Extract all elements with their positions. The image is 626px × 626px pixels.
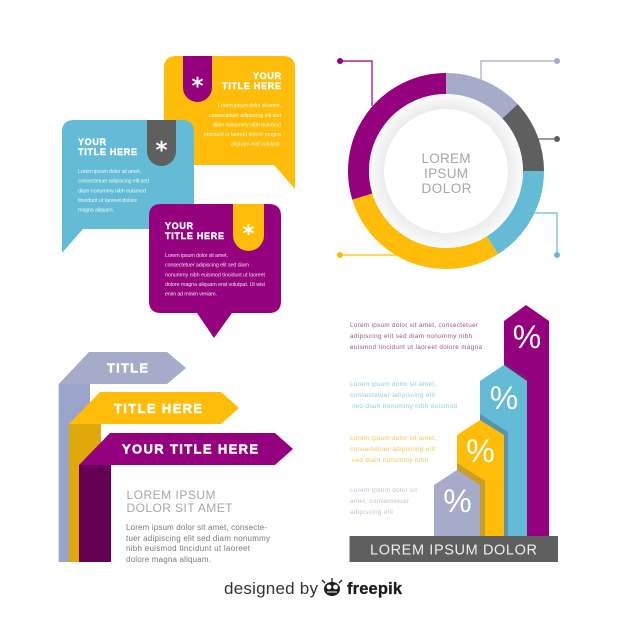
- bar: yellow: [457, 420, 504, 536]
- bubble: purple: TITLE HERE: [165, 231, 224, 241]
- base label: LOREM IPSUM DOLOR: [370, 542, 537, 558]
- text: yellow: Lorem ipsum dolor sit amet,: [350, 435, 436, 442]
- text: purple: Lorem ipsum dolor sit amet, consectetuer: [350, 322, 478, 329]
- donut centre: [369, 94, 523, 248]
- text: purple: adipiscing elit sed diam nonummy nibh: [350, 333, 472, 340]
- text: yellow: [350, 435, 436, 464]
- bubble: purple: *: [242, 222, 255, 248]
- arrow: your title here: YOUR TITLE HERE: [122, 442, 258, 456]
- arrow: your title here: [79, 433, 293, 562]
- text: purple: euismod tincidunt ut laoreet dolore magna: [350, 344, 482, 351]
- footer: freepik credit: freepik: [347, 580, 403, 598]
- donut ring: [358, 84, 534, 259]
- text: yellow: sed diam nonummy nibh: [352, 457, 428, 464]
- heading: LOREM IPSUM: [126, 488, 216, 502]
- bubble: yellow: Lorem ipsum dolor sit amet,: [218, 103, 282, 109]
- bubble: yellow: *: [191, 74, 204, 100]
- paragraph: dolore magna aliquam.: [126, 555, 211, 564]
- bubble: blue: consectetuer adipiscing elit sed: [78, 179, 149, 185]
- text: blue: [350, 381, 457, 410]
- icon: freepik logo: [322, 578, 342, 596]
- text: grey: amet, consectetuer: [350, 498, 409, 505]
- text: blue: sed diam nonummy nibh euismod: [352, 403, 457, 410]
- bubble: yellow: YOUR: [253, 71, 282, 81]
- bubble: blue: [62, 120, 194, 253]
- donut centre: IPSUM: [424, 166, 468, 181]
- bubble: blue: magna aliquam.: [78, 208, 114, 214]
- paragraph: Lorem ipsum dolor sit amet, consecte-: [126, 523, 267, 532]
- bubble: blue: tincidunt ut laoreet dolore: [78, 198, 137, 204]
- bubble: yellow: aliquam erat volutpat.: [231, 142, 281, 148]
- bar: purple: %: [513, 319, 541, 355]
- heading: DOLOR SIT AMET: [126, 501, 233, 515]
- text: grey: Lorem ipsum dolor sit: [350, 487, 417, 494]
- bubble: blue: *: [155, 138, 168, 164]
- connector dots: [337, 58, 560, 258]
- bubble: yellow: consectetuer adipiscing elit sed: [209, 113, 281, 119]
- base label: [350, 536, 558, 562]
- donut centre: DOLOR: [422, 181, 472, 196]
- panel: percent bars: [350, 305, 558, 562]
- paragraph: [126, 523, 270, 564]
- bubble: yellow: [164, 56, 295, 189]
- bubble: blue: Lorem ipsum dolor sit amet,: [78, 169, 142, 175]
- footer: freepik credit: designed by: [224, 579, 318, 598]
- panel: donut chart: [337, 58, 560, 259]
- arrow: title: [59, 352, 186, 562]
- bubble: purple: YOUR: [165, 221, 194, 231]
- bar: blue: %: [490, 380, 518, 416]
- bar: yellow: %: [466, 433, 495, 469]
- arrow: title here: [69, 392, 239, 562]
- bar: grey: [434, 470, 480, 536]
- bubble: blue: YOUR: [78, 137, 106, 147]
- bubble: blue: diam nonummy nibh euismod: [78, 188, 146, 194]
- bubble: purple: enim ad minim veniam.: [165, 292, 217, 298]
- bubble: purple: consectetuer adipiscing elit sed diam: [165, 263, 250, 269]
- bubble: purple: dolore magna aliquam erat volutpat. Ut wisi: [165, 282, 265, 288]
- text: yellow: consectetuer adipiscing elit: [350, 446, 435, 453]
- text: blue: consectetuer adipiscing elit: [350, 392, 435, 399]
- bubble: yellow: tincidunt ut laoreet dolore magna: [204, 132, 281, 138]
- bar: grey: %: [443, 483, 472, 519]
- bar: purple: [504, 305, 549, 536]
- panel: stacked arrows: [59, 352, 293, 564]
- bubble: purple: [149, 204, 281, 338]
- bubble: blue: TITLE HERE: [78, 147, 137, 157]
- text: grey: adipiscing elit: [350, 509, 393, 516]
- heading: [126, 488, 233, 515]
- bubble: purple: nonummy nibh euismod tincidunt ut laoreet: [165, 272, 266, 278]
- text: purple: [350, 322, 482, 351]
- arrow: title: TITLE: [107, 360, 148, 376]
- connector lines: [340, 61, 557, 255]
- bubble: yellow: TITLE HERE: [222, 81, 281, 91]
- text: grey: [350, 487, 417, 516]
- bar: blue: [480, 365, 527, 536]
- donut centre: LOREM: [422, 151, 470, 166]
- text: blue: Lorem ipsum dolor sit amet,: [350, 381, 436, 388]
- arrow: title here: TITLE HERE: [114, 401, 202, 416]
- paragraph: nibh euismod tincidunt ut laoreet: [126, 544, 251, 553]
- footer: freepik credit: [224, 578, 403, 598]
- panel: speech bubbles: [62, 56, 295, 338]
- paragraph: tuer adipiscing elit sed diam nonummy: [126, 534, 270, 543]
- bubble: yellow: diam nonummy nibh euismod: [213, 122, 281, 128]
- bubble: purple: Lorem ipsum dolor sit amet,: [165, 253, 228, 259]
